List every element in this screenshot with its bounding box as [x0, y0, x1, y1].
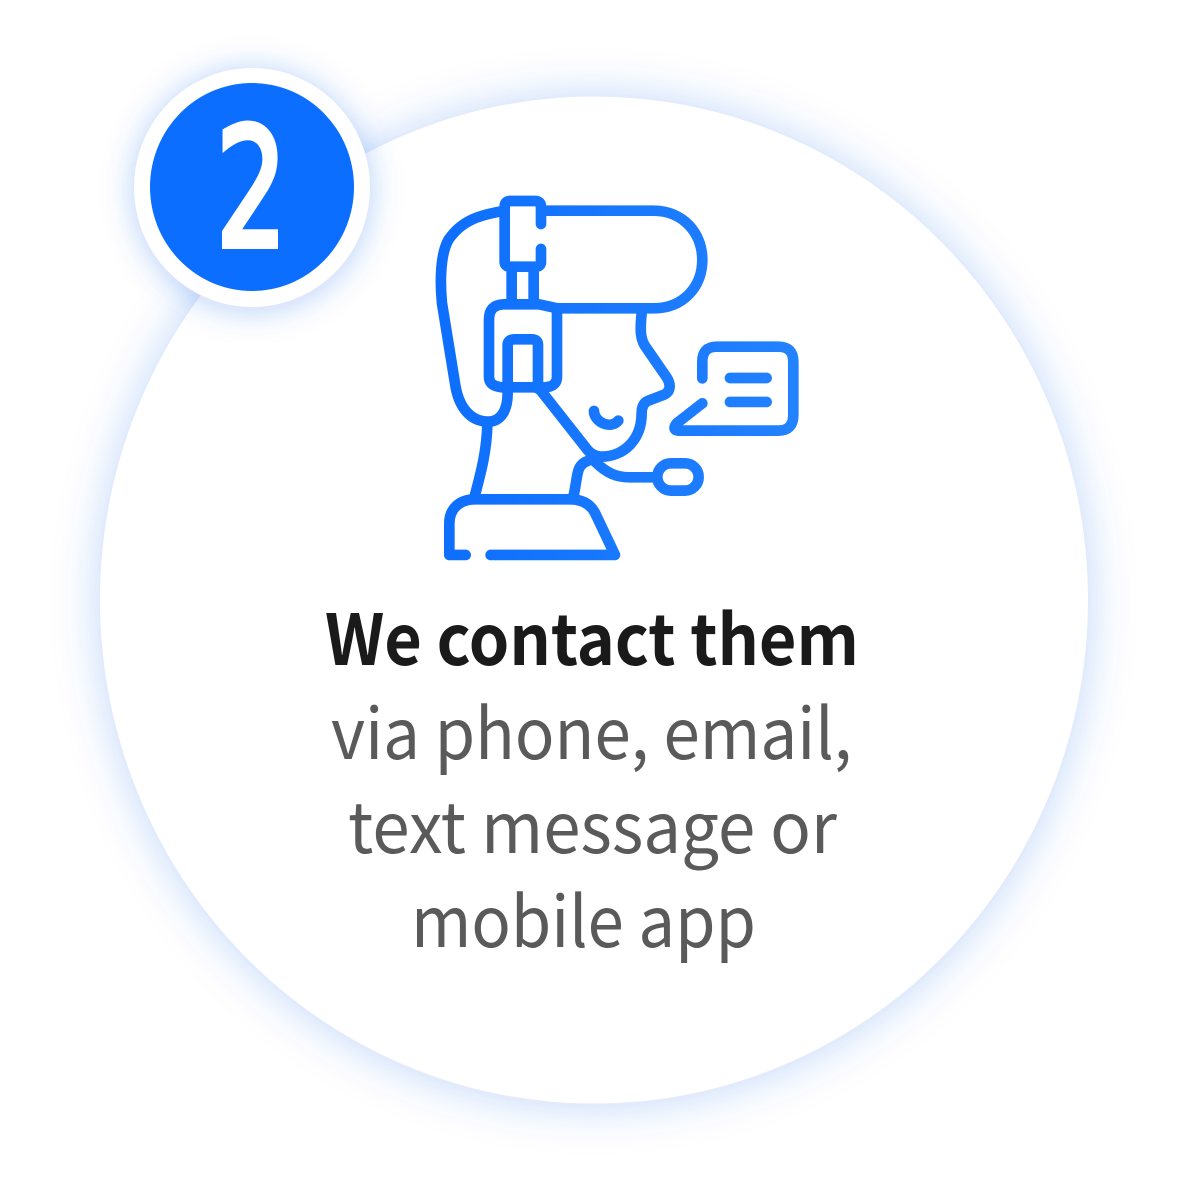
text block: description: mobile app	[411, 867, 756, 968]
panel: main circle	[100, 96, 1088, 1105]
badge: step number	[134, 68, 370, 310]
icon: agent with headset and speech bubble	[441, 201, 793, 555]
text block: description: via phone, email,	[331, 679, 852, 780]
heading: We contact them	[325, 585, 859, 686]
badge: step number: 2	[216, 94, 287, 286]
text block: description	[331, 679, 852, 968]
text block: description: text message or	[348, 773, 838, 874]
